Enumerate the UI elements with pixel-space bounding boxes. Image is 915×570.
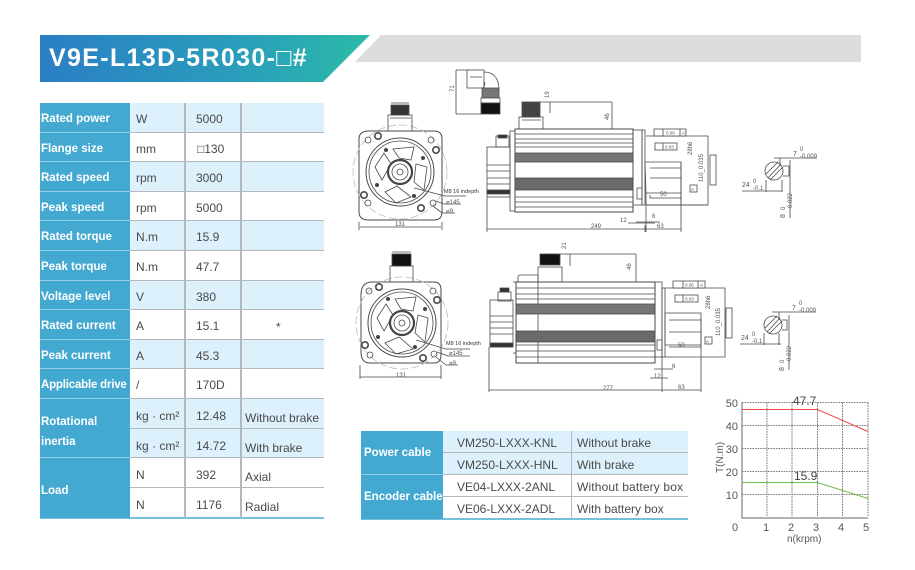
drawing: front view, motor with brake: M8 16 indepth [446,341,481,347]
cable row: VM250 HNL [361,453,688,475]
cable row: VE06 ADL: VE06-LXXX-2ADL [457,502,555,516]
row: radial load: Radial [245,500,279,514]
drawing: keyway section, motor with brake: 8 [779,367,786,371]
row: rated power: 5000 [196,112,223,126]
row: inertia with brake: 14.72 [196,439,226,453]
label: peak speed: Peak speed [41,202,104,214]
label: voltage level: Voltage level [41,291,110,303]
title banner [40,35,370,82]
drawing: side view, motor with brake: 50 [678,343,685,349]
cable row: VE06 ADL: With battery box [577,502,664,516]
drawing: side view, motor with brake: A [706,339,709,344]
row: inertia without brake: Without brake [245,411,319,425]
label: load: Load [41,485,68,497]
drawing: side view, motor without brake: 249 [591,224,602,230]
drawing: keyway section, motor with brake: 0 [799,301,803,307]
row: flange size [40,133,324,162]
drawing: side view, motor without brake: 50 [660,192,667,198]
y axis ticks: 10 [726,490,738,502]
table bottom rule [40,517,324,519]
y axis ticks: 50 [726,398,738,410]
label: load [40,458,130,518]
row: peak current [40,340,324,369]
curve value labels: 47.7 [793,394,817,408]
row: rated current: A [136,319,144,333]
drawing: side view, motor without brake: 19 [545,91,551,98]
drawing: side view, motor without brake: 12 [620,218,627,224]
x axis ticks: 3 [813,522,819,534]
drawing: keyway section, motor without brake: 7 [793,151,797,158]
drawing: front view, motor with brake: ⌀9 [449,361,457,367]
grey header bar [355,35,861,62]
drawing: keyway section, motor with brake: -0.009 [799,308,817,314]
curve value labels: 15.9 [794,469,818,483]
label: rated current [40,310,130,340]
row: applicable drive: 170D [196,378,225,392]
curve: rated torque [742,482,868,498]
drawing: keyway section, motor without brake: -0.1 [753,186,764,192]
label: power cable: Power cable [364,447,431,459]
label: flange size [40,133,130,162]
drawing: front view, motor without brake: M8 16 indepth [444,189,479,195]
drawing: side view, motor without brake [487,91,716,232]
label: flange size: Flange size [41,143,103,155]
row: rated power [40,103,324,133]
label: rated power [40,103,130,133]
label: rated torque: Rated torque [41,231,112,243]
cable row: VE04 ANL [361,475,688,497]
drawing: side view, motor with brake: 63 [678,385,685,391]
row: radial load: 1176 [196,498,222,512]
cable row: VM250 KNL: Without brake [577,436,651,450]
row: rated speed: rpm [136,171,157,185]
drawing: side view, motor with brake: 0.03 [685,296,694,302]
row: axial load: Axial [245,470,271,484]
row: radial load: N [136,498,145,512]
label: rotational inertia: inertia [41,436,76,448]
drawing: keyway section, motor with brake: 0 [752,332,756,338]
drawing: keyway section, motor with brake: 7 [792,305,796,312]
drawing: front view, motor with brake: 131 [396,373,407,379]
label: peak current: Peak current [41,350,111,362]
drawing: side view, motor with brake: 12 [654,374,661,380]
y axis ticks [726,398,738,502]
label: rotational inertia [40,399,130,458]
axis titles: n(krpm) [787,534,821,545]
drawing: side view, motor with brake: 28h6 [706,295,712,309]
drawing: side view, motor without brake: 46 [605,113,611,120]
drawing: keyway section, motor without brake: -0.009 [800,154,818,160]
drawing: side view, motor with brake: 0.06 [685,282,694,288]
x axis ticks [732,522,869,534]
drawing: side view, motor with brake: 110_0.035 [716,307,722,336]
label: power cable [361,431,443,475]
label: rated torque [40,221,130,251]
row: axial load [40,458,324,488]
table top rule [40,102,324,104]
label: peak torque [40,251,130,281]
drawing: keyway section, motor without brake: 0 [753,179,757,185]
chart grid [742,402,868,517]
row: voltage level: 380 [196,290,216,304]
label: peak current [40,340,130,369]
label: rotational inertia: Rotational [41,416,97,428]
cable column divider [570,431,572,518]
curve value labels [793,394,818,483]
label: rated speed: Rated speed [41,172,109,184]
drawing: keyway section, motor with brake: 0 [780,359,786,363]
row: inertia with brake [40,429,324,458]
x axis ticks: 0 [732,522,738,534]
row: rated current: 15.1 [196,319,219,333]
drawing: side view, motor without brake: 0.03 [665,144,674,150]
cable row: VM250 HNL: VM250-LXXX-HNL [457,458,558,472]
row: axial load: 392 [196,468,216,482]
label: encoder cable: Encoder cable [364,491,443,503]
row: rated current [40,310,324,340]
cable row: VE04 ANL: VE04-LXXX-2ANL [457,480,555,494]
x axis ticks: 4 [838,522,844,534]
row: rated speed: 3000 [196,171,223,185]
drawing: side view, motor with brake: A [700,282,703,288]
row: rated torque: 15.9 [196,230,219,244]
drawing: side view, motor without brake: 28h6 [688,141,694,155]
row: rated torque: N.m [136,230,158,244]
label: encoder cable [361,475,443,518]
cable table top rule [361,430,688,432]
row: inertia with brake: With brake [245,441,302,455]
drawing: keyway section, motor without brake: 0 [800,147,804,153]
label: rated power: Rated power [41,113,110,125]
column dividers [184,103,242,518]
row: peak current: 45.3 [196,349,219,363]
drawing: side view, motor with brake [489,242,732,392]
cable row: VM250 HNL: With brake [577,458,634,472]
title banner: V9E-L13D-5R030-□# [49,44,308,72]
label: voltage level [40,281,130,310]
cable table bottom rule [361,518,688,520]
drawing: keyway section, motor without brake: 0 [781,206,787,210]
drawing: keyway section, motor with brake: 24 [741,335,749,342]
drawing: side view, motor with brake: 6 [672,364,676,370]
row: applicable drive [40,369,324,399]
y axis ticks: 20 [726,467,738,479]
chart axes [742,402,868,518]
row: inertia without brake: kg · cm² [136,409,179,423]
row: rated current: * [276,320,281,334]
y axis ticks: 30 [726,444,738,456]
row: voltage level [40,281,324,310]
drawing: keyway section, motor without brake: 24 [742,182,750,189]
row: axial load: N [136,468,145,482]
drawing: side view, motor without brake: A [691,187,694,192]
drawing: side view, motor without brake: A [682,130,685,136]
drawing: front view, motor with brake: ⌀145 [449,351,463,357]
drawing: keyway section, motor without brake: -0.022 [788,192,794,210]
row: inertia without brake: 12.48 [196,409,226,423]
row: rated speed [40,162,324,192]
row: peak speed: 5000 [196,201,223,215]
label: applicable drive [40,369,130,399]
x axis ticks: 2 [788,522,794,534]
label: applicable drive: Applicable drive [41,379,127,391]
drawing: side view, motor with brake: 277 [603,386,614,392]
cable row: VE06 ADL [457,502,664,516]
drawing: keyway section, motor with brake: -0.022 [787,345,793,363]
row: peak current: A [136,349,144,363]
drawing: side view, motor without brake: 0.06 [666,130,675,136]
row: peak speed [40,192,324,221]
row: radial load [136,498,279,514]
row: inertia with brake: kg · cm² [136,439,179,453]
axis titles [715,442,821,545]
y axis ticks: 40 [726,421,738,433]
drawing: keyway section, motor without brake [742,147,818,218]
label: rated speed [40,162,130,192]
drawing: elbow connector [450,70,500,114]
x axis ticks: 1 [763,522,769,534]
row: flange size: mm [136,142,156,156]
drawing: side view, motor with brake: 46 [627,263,633,270]
drawing: front view, motor without brake [353,103,479,230]
drawing: side view, motor without brake: 110_0.035 [699,153,705,182]
drawing: keyway section, motor without brake: 8 [780,214,787,218]
row: peak torque: N.m [136,260,158,274]
drawing: front view, motor without brake: 131 [395,222,406,228]
label: peak speed [40,192,130,221]
row: voltage level: V [136,290,144,304]
drawing: keyway section, motor with brake [740,301,817,371]
curve: peak torque [742,410,868,432]
row: applicable drive: / [136,378,139,392]
drawing: front view, motor without brake: ⌀9 [446,209,454,215]
cable row: VE04 ANL: Without battery box [577,480,683,494]
row: peak torque [40,251,324,281]
drawing: keyway section, motor with brake: -0.1 [752,339,763,345]
cable row: VM250 KNL [361,431,688,453]
drawing: side view, motor without brake: 6 [652,214,656,220]
row: peak torque: 47.7 [196,260,219,274]
row: rated power: W [136,112,147,126]
row: flange size: □130 [197,142,224,156]
label: rated current: Rated current [41,320,116,332]
axis titles: T(N.m) [715,442,726,473]
row: rated torque [40,221,324,251]
drawing: elbow connector: 71 [450,85,456,92]
x axis ticks: 5 [863,522,869,534]
drawing: front view, motor with brake [356,252,481,379]
drawing: front view, motor without brake: ⌀145 [446,200,460,206]
row: peak speed: rpm [136,201,157,215]
drawing: side view, motor without brake: 63 [657,224,664,230]
drawing: side view, motor with brake: 21 [562,242,568,249]
row: inertia without brake [40,399,324,429]
cable row: VM250 KNL: VM250-LXXX-KNL [457,436,557,450]
label: peak torque: Peak torque [41,261,107,273]
